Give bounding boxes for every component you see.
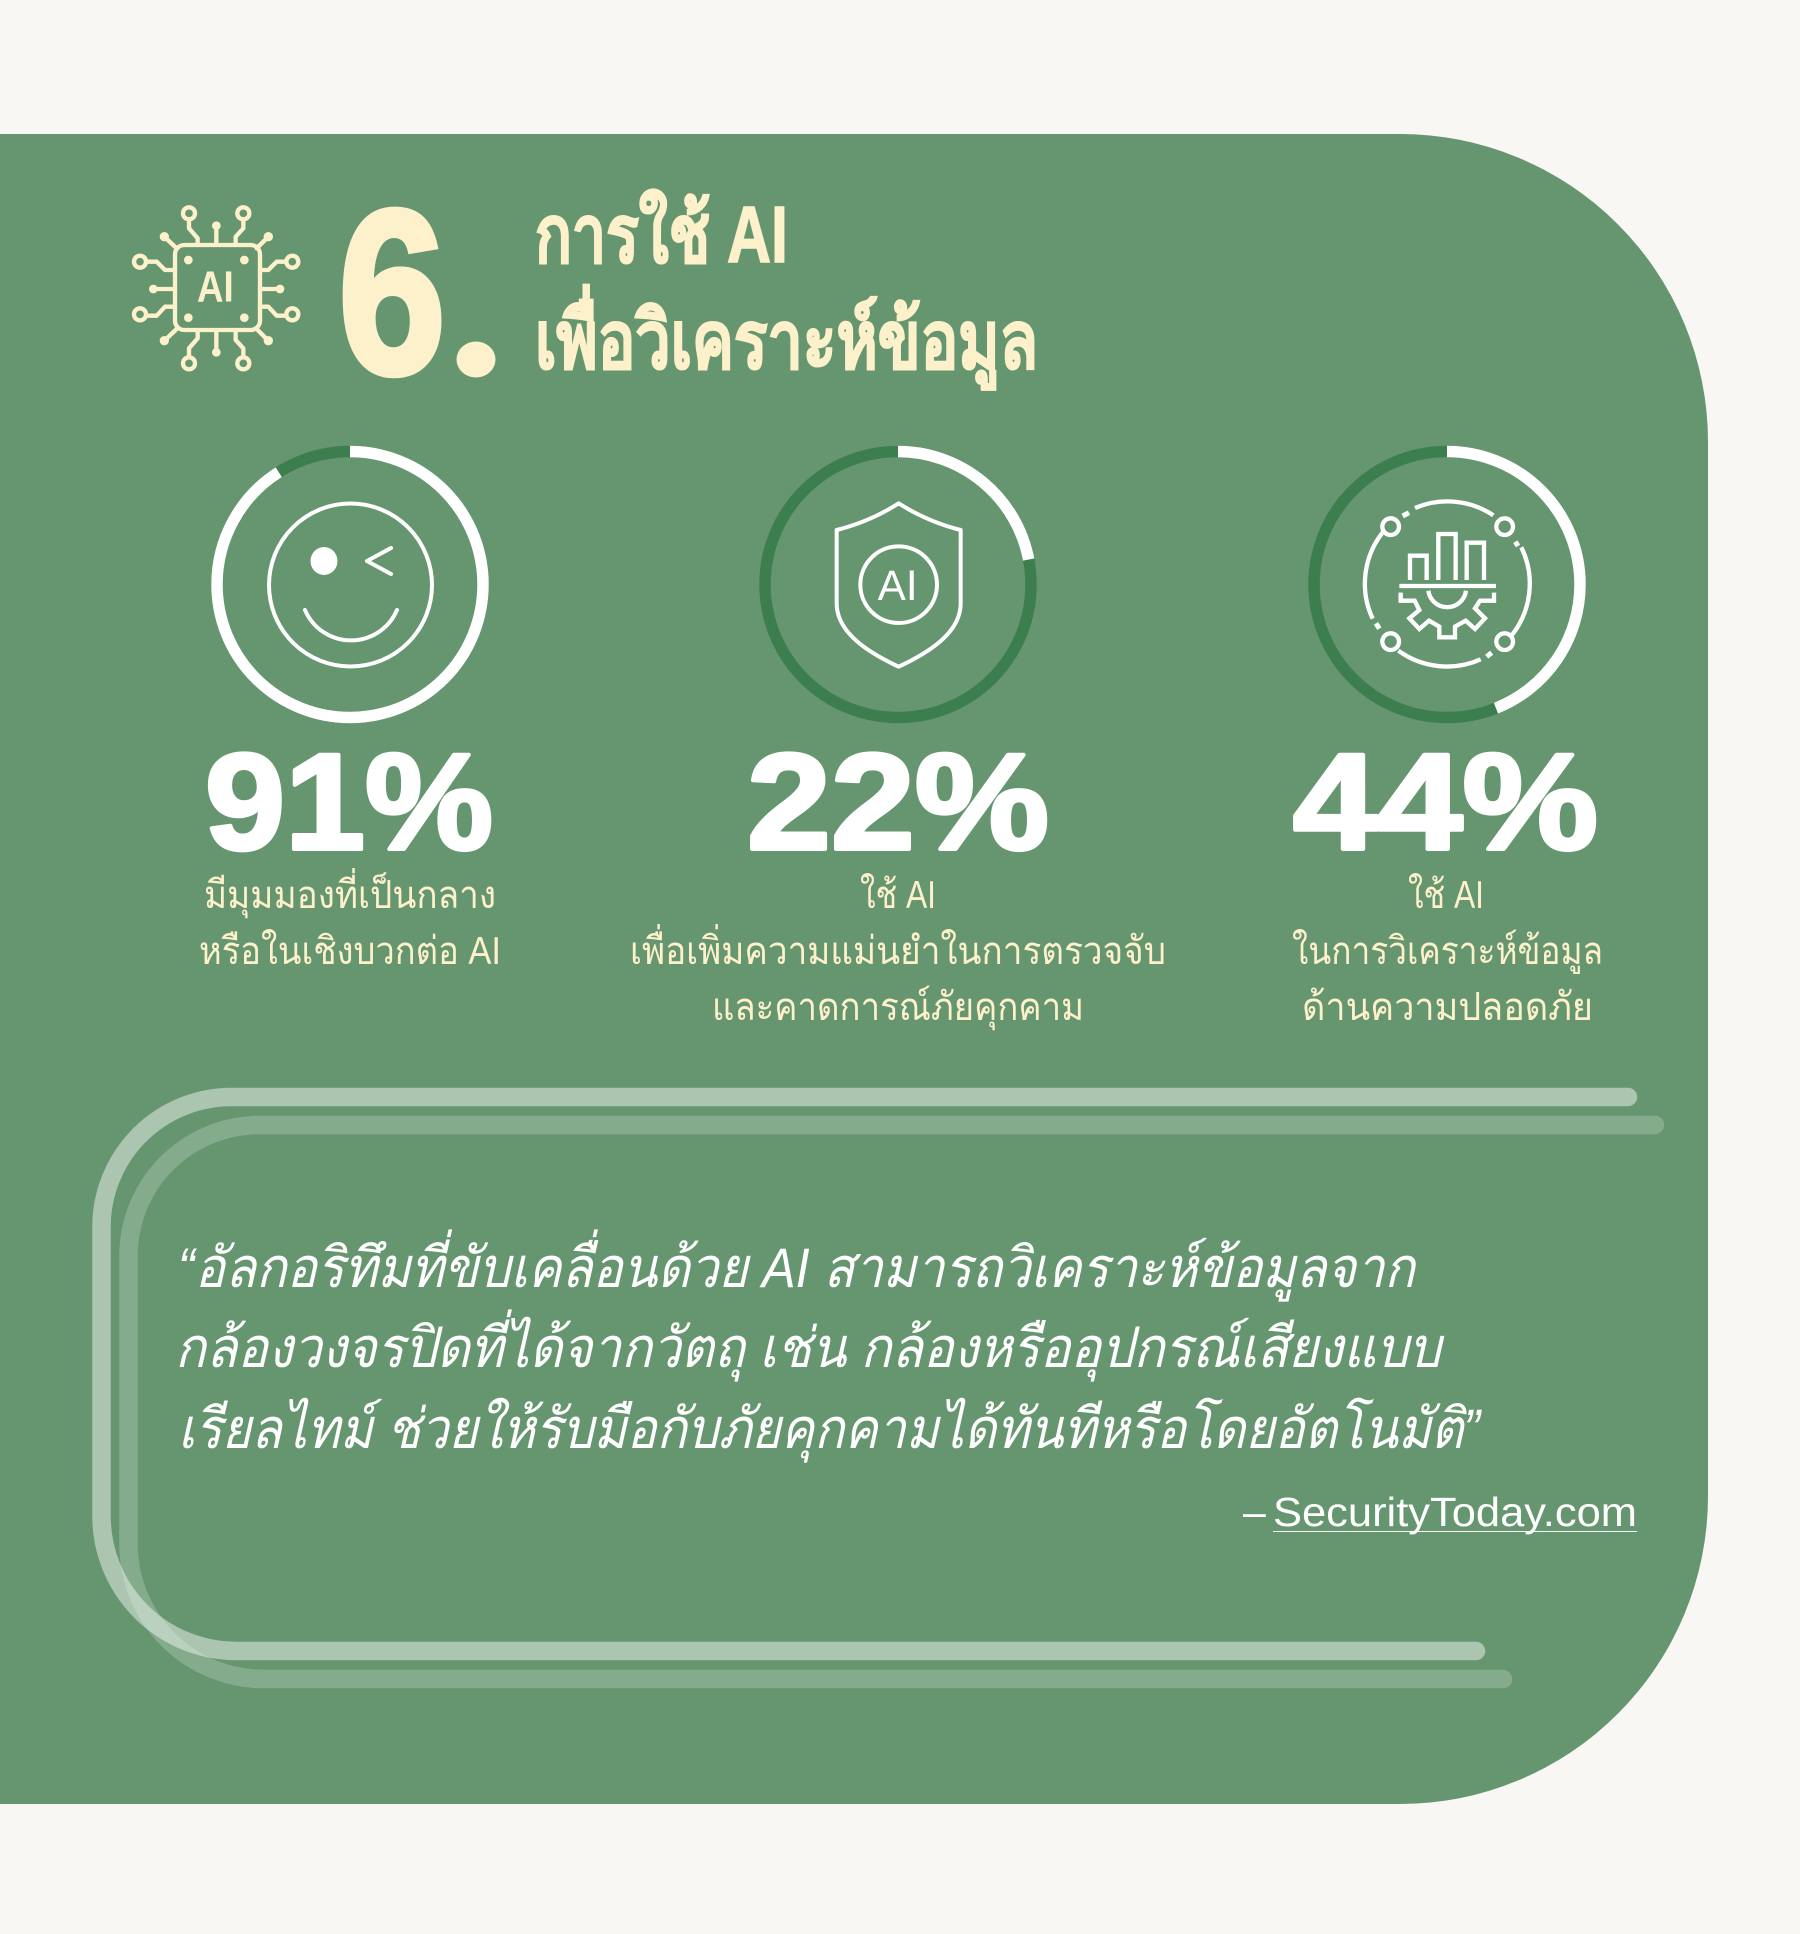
icon: AI shield: AI (878, 562, 918, 610)
quote text: เรียลไทม์ ช่วยให้รับมือกับภัยคุกคามได้ทันทีหรือโดยอัตโนมัติ” (178, 1397, 1482, 1463)
chart: donut ring 44% (1314, 452, 1580, 718)
quote text (175, 1229, 1482, 1463)
caption: 91%: หรือในเชิงบวกต่อ AI (199, 929, 501, 973)
stat: 22% (630, 726, 1166, 1031)
caption: 22%: เพื่อเพิ่มความแม่นยำในการตรวจจับ (630, 924, 1166, 973)
caption: 91%: มีมุมมองที่เป็นกลาง (204, 868, 496, 919)
quote text: “อัลกอริทึมที่ขับเคลื่อนด้วย AI สามารถวิเคราะห์ข้อมูลจาก (178, 1229, 1418, 1302)
heading: title text: เพื่อวิเคราะห์ข้อมูล (535, 284, 1038, 391)
caption: 22%: ใช้ AI (860, 873, 936, 917)
caption: 44%: ด้านความปลอดภัย (1302, 986, 1593, 1029)
stat: 91% (199, 726, 501, 973)
quote text: กล้องวงจรปิดที่ได้จากวัตถุ เช่น กล้องหรืออุปกรณ์เสียงแบบ (175, 1309, 1445, 1382)
caption: 22% (630, 873, 1166, 1031)
source attribution: – (1243, 1489, 1266, 1535)
icon: AI chip (134, 207, 298, 369)
icon: AI shield (837, 503, 961, 667)
icon: winking smiley (269, 504, 432, 666)
source attribution: SecurityToday.com (1273, 1489, 1637, 1535)
stat: 22%: 22% (747, 726, 1049, 879)
heading: title text (535, 188, 1038, 391)
caption: 44% (1292, 873, 1603, 1029)
stat: 91%: 91% (205, 726, 493, 879)
icon: data gear (1365, 501, 1530, 667)
caption: 22%: และคาดการณ์ภัยคุกคาม (712, 985, 1084, 1031)
caption: 44%: ใช้ AI (1408, 873, 1484, 917)
chart: donut ring 91% (217, 452, 483, 718)
chart: donut ring 22% (765, 452, 1031, 718)
icon: AI chip: AI (197, 263, 234, 312)
caption: 44%: ในการวิเคราะห์ข้อมูล (1292, 929, 1603, 974)
heading number: 6.: 6 (338, 161, 446, 423)
heading: title text: การใช้ AI (535, 188, 788, 279)
frame: quote outlines (102, 1097, 1655, 1679)
caption: 91% (199, 868, 501, 973)
stat: 44% (1292, 726, 1603, 1029)
stat: 44%: 44% (1293, 726, 1598, 879)
